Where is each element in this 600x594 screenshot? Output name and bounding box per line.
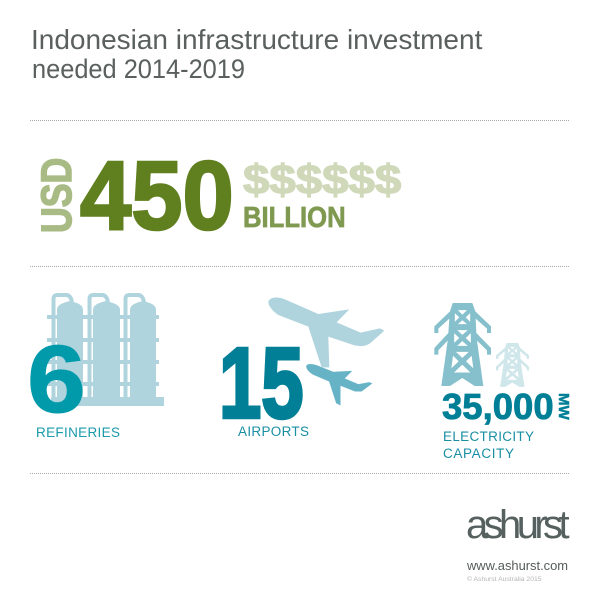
icon: large pylon bbox=[434, 303, 491, 386]
panel: investment total bbox=[33, 142, 401, 251]
number 15: 15 bbox=[219, 327, 304, 439]
number 6: 6 bbox=[27, 326, 86, 433]
icon: refinery bbox=[47, 295, 164, 406]
title: needed 2014-2019 bbox=[32, 53, 245, 84]
capacity number: 35,000 bbox=[442, 386, 554, 427]
icon: large plane bbox=[268, 298, 384, 367]
panel: refineries bbox=[27, 295, 164, 440]
title bbox=[31, 24, 483, 84]
rotated USD label: USD bbox=[33, 158, 81, 233]
panel: electricity bbox=[434, 303, 572, 461]
billion label: BILLION bbox=[243, 201, 346, 233]
icon: small pylon bbox=[496, 343, 529, 387]
electricity capacity label: CAPACITY bbox=[443, 446, 514, 461]
panel: airports bbox=[219, 298, 384, 439]
electricity capacity label bbox=[443, 429, 534, 461]
website: www.ashurst.com bbox=[466, 558, 568, 573]
airports label: AIRPORTS bbox=[238, 424, 309, 439]
copyright: © Ashurst Australia 2015 bbox=[467, 575, 542, 583]
dollar signs: $$$$$$ bbox=[243, 157, 401, 203]
logo: ashurst: ashurst bbox=[466, 503, 569, 547]
icon: small plane bbox=[306, 364, 373, 406]
MW unit: MW bbox=[555, 393, 572, 420]
refineries label: REFINERIES bbox=[36, 425, 120, 440]
big number 450: 450 bbox=[80, 142, 234, 251]
electricity capacity label: ELECTRICITY bbox=[443, 429, 534, 444]
title: Indonesian infrastructure investment bbox=[31, 24, 483, 55]
